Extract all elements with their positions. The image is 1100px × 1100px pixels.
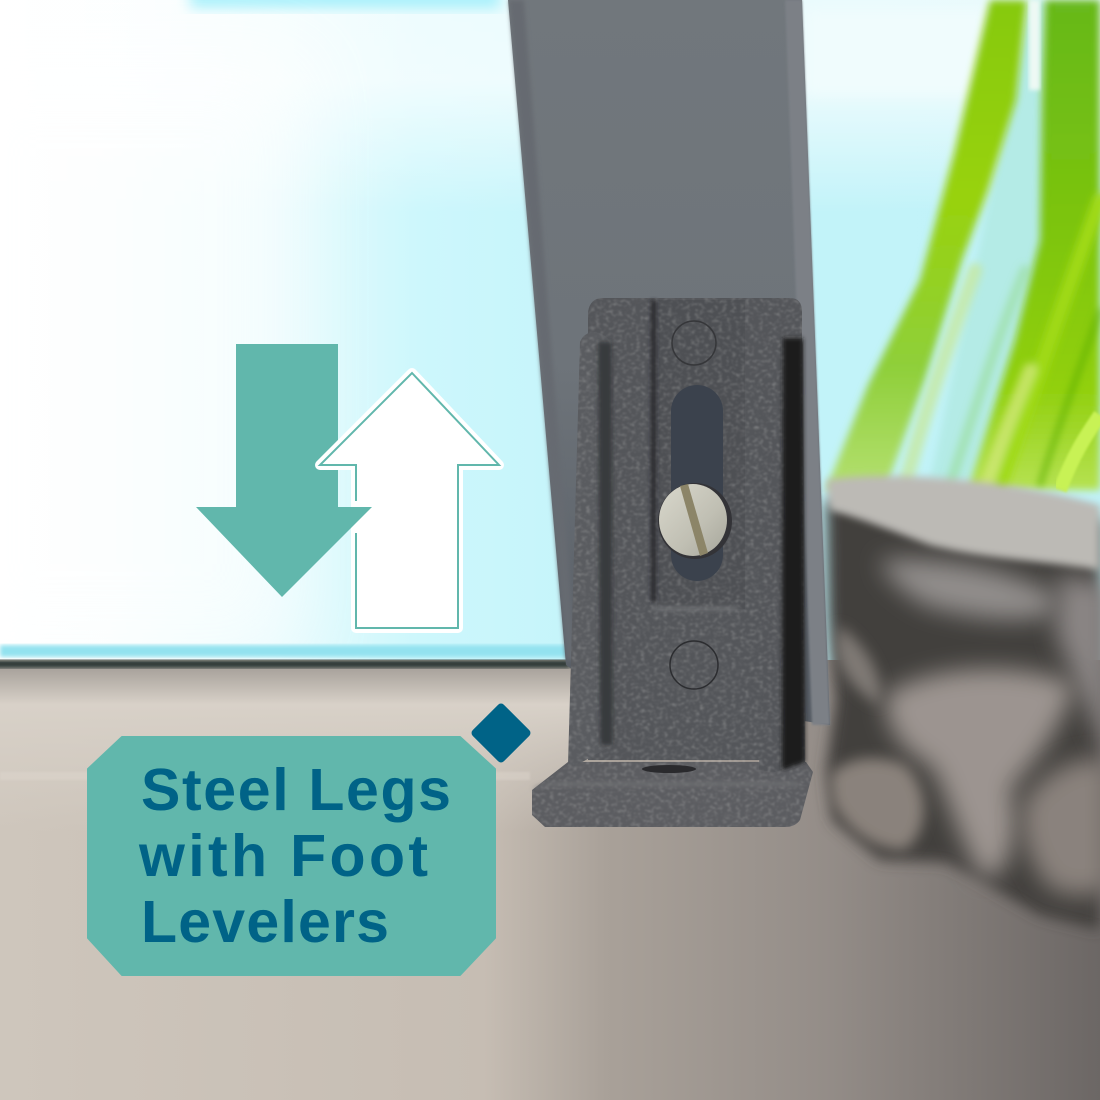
- steel leg: [508, 0, 830, 725]
- bracket texture: [530, 296, 820, 830]
- table surface: [0, 660, 1100, 1100]
- bracket base: [532, 762, 813, 827]
- cloth: [826, 476, 1100, 930]
- lower rivet: [670, 641, 718, 689]
- left rib: [568, 332, 613, 766]
- bracket hole: [642, 765, 696, 773]
- screw: [658, 483, 732, 559]
- label: steel legs with foot levelers: with Foot: [138, 823, 428, 889]
- icon: white up arrow: [320, 373, 499, 628]
- label: steel legs with foot levelers: [88, 737, 495, 975]
- adjustment slot: [671, 385, 723, 581]
- right rib: [759, 332, 805, 772]
- grass plant: [826, 0, 1100, 490]
- upper rivet: [672, 321, 716, 365]
- label: steel legs with foot levelers: Levelers: [141, 889, 389, 955]
- bracket plate: [588, 298, 802, 760]
- icon: teal down arrow head: [196, 507, 372, 597]
- foot leveler bracket: [530, 296, 820, 830]
- icon: teal down arrow shaft: [236, 344, 338, 507]
- label: steel legs with foot levelers: Steel Legs: [141, 757, 451, 823]
- window background: [0, 0, 1100, 665]
- icon: blue diamond: [470, 702, 532, 764]
- rib shadows: [532, 300, 805, 789]
